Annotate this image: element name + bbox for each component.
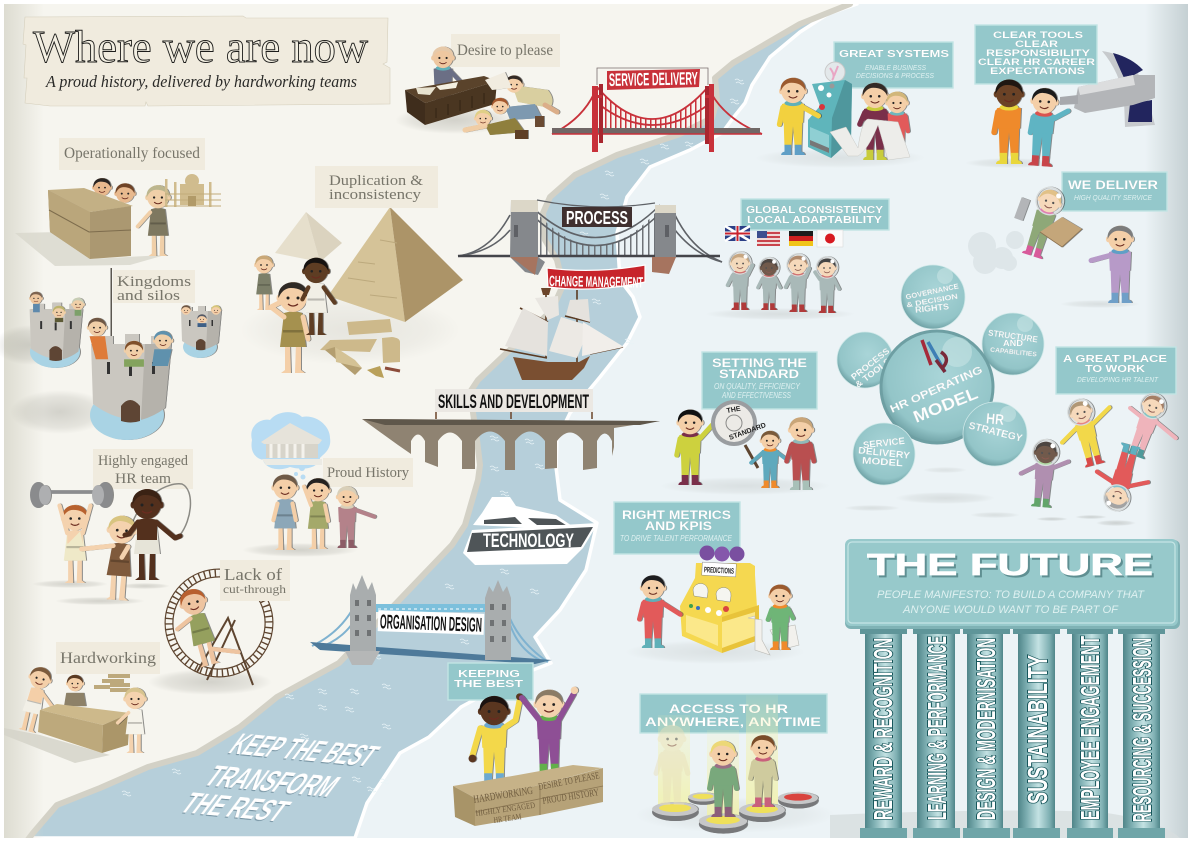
icon: Taj Mahal [165, 174, 221, 207]
desk [405, 76, 497, 125]
hull [463, 523, 598, 565]
skipping man [125, 489, 180, 580]
cables [458, 205, 722, 262]
label [451, 34, 560, 67]
teleport pads [652, 792, 818, 834]
banner rope [537, 200, 655, 207]
pillar: resourcing and succession: RESOURCING & SUCCESSION [1127, 638, 1157, 822]
panel: global consistency [705, 199, 889, 320]
icon: HR logo [922, 340, 946, 372]
ground shadow [240, 295, 460, 365]
left tower [345, 575, 380, 665]
front worker [118, 687, 147, 753]
hull [513, 356, 590, 380]
sphere: HR strategy [963, 402, 1027, 466]
name: TECHNOLOGY [483, 531, 574, 552]
large central castle [87, 318, 173, 440]
sphere: process and tools [837, 332, 893, 390]
rear workers [15, 665, 86, 737]
hangers [537, 213, 655, 255]
label: ENABLE BUSINESS [865, 63, 926, 72]
workers [92, 178, 171, 256]
pillar: employee engagement [1067, 628, 1113, 838]
skipping rope [130, 484, 190, 535]
floor shadows [1036, 515, 1136, 526]
heading: THE FUTURE [867, 547, 1153, 582]
label: HIGH QUALITY SERVICE [1074, 193, 1153, 202]
bridge: process [458, 200, 722, 275]
label [59, 138, 205, 170]
sign [378, 610, 484, 637]
sphere: service delivery: DELIVERY [858, 445, 910, 461]
label: WE DELIVER [1068, 180, 1159, 192]
boxer girl [78, 513, 138, 601]
astronauts [728, 252, 839, 313]
sign: SKILLS AND DEVELOPMENT [438, 391, 589, 413]
label: CLEAR [1015, 39, 1058, 50]
ground shadow [395, 106, 515, 134]
hr operating model spheres [837, 265, 1044, 518]
label: ANYWHERE, ANYTIME [645, 715, 821, 729]
stone block [48, 188, 133, 259]
stone viaduct [362, 419, 660, 470]
label [113, 270, 195, 304]
pillars [860, 628, 1165, 838]
label [93, 449, 193, 489]
sphere: process and tools: PROCESS [849, 346, 892, 382]
pillar: learning and performance [913, 628, 960, 838]
characters [709, 735, 776, 817]
pillar: sustainability: SUSTAINABILITY [1022, 655, 1053, 804]
panel: the future [830, 539, 1180, 838]
hamster wheel [169, 573, 269, 685]
scene: desire to please [395, 34, 560, 139]
sphere: main operating model: MODEL [910, 384, 981, 427]
characters [779, 78, 909, 160]
banner: PROCESS [566, 208, 628, 228]
label [702, 352, 817, 409]
label: TO DRIVE TALENT PERFORMANCE [620, 534, 733, 543]
panel: setting the standard [660, 352, 830, 495]
pillar: resourcing and succession [1118, 628, 1165, 838]
light beams [658, 695, 778, 820]
label: Proud History [327, 465, 409, 481]
towers [592, 84, 714, 152]
label: THE BEST [454, 678, 524, 690]
river slogan [173, 727, 387, 828]
banner: change management: CHANGE MANAGEMENT [549, 273, 643, 292]
jetpack courier [1014, 184, 1067, 260]
paper readout [830, 119, 910, 160]
label: RESPONSIBILITY [986, 48, 1091, 59]
ground shadow [635, 797, 835, 833]
sphere: structure: CAPABILITIES [990, 347, 1038, 359]
ground shadows [10, 390, 110, 434]
crates: HIGHLY ENGAGED [475, 800, 536, 818]
sphere: governance: & DECISION [906, 292, 958, 309]
icon: magnifying glass with the standard: STANDARD [728, 422, 767, 442]
small right castle [181, 305, 221, 358]
workers [254, 255, 335, 373]
parchment [23, 16, 390, 106]
label: LOCAL ADAPTABILITY [747, 215, 882, 226]
label [56, 642, 160, 674]
label: GLOBAL CONSISTENCY [746, 205, 883, 216]
manifesto: PEOPLE MANIFESTO: TO BUILD A COMPANY THAT [877, 589, 1145, 601]
label: EXPECTATIONS [990, 66, 1085, 77]
flags [725, 226, 843, 247]
scene: hardworking [4, 642, 160, 763]
label: CLEAR HR CAREER [978, 57, 1095, 68]
small pyramid [275, 212, 342, 262]
floor shadows [844, 467, 1020, 518]
bridge: organisation design [310, 575, 552, 665]
crates: DESIRE TO PLEASE [537, 770, 600, 793]
label: A GREAT PLACE [1063, 353, 1167, 365]
small left castle [29, 292, 85, 368]
flag pole [110, 268, 112, 360]
label [323, 458, 413, 487]
panel: right metrics and KPIs [614, 502, 805, 664]
label: SETTING THE [712, 358, 807, 370]
label: TO WORK [1085, 363, 1145, 375]
panel: access to HR [635, 694, 835, 834]
ground shadow [830, 811, 1180, 838]
label: Kingdoms [117, 274, 191, 290]
scene: kingdoms and silos [0, 268, 221, 440]
deck [552, 128, 762, 134]
ship [500, 288, 624, 380]
sphere: main operating model [881, 331, 993, 443]
sphere: service delivery [853, 423, 915, 485]
sphere: service delivery: MODEL [862, 455, 904, 469]
label: STANDARD [719, 369, 799, 381]
flag: Japan [817, 230, 843, 247]
label: KEEPING [458, 668, 520, 680]
name band [467, 527, 593, 552]
ground shadow [4, 728, 110, 763]
right edge shading [1145, 4, 1188, 838]
thought cloud with temple [251, 412, 330, 480]
ground shadow [1060, 300, 1140, 308]
ground shadow [148, 669, 272, 695]
sign [435, 389, 593, 419]
walkway [372, 604, 492, 612]
pillar: sustainability [1013, 628, 1060, 838]
crates [453, 765, 603, 826]
yacht: technology [463, 497, 598, 565]
sphere: governance [901, 265, 965, 329]
label [741, 199, 889, 230]
label: DECISIONS & PROCESS [856, 71, 934, 80]
label [834, 42, 953, 88]
icon: magnifying glass with the standard [711, 400, 767, 468]
parcel [1040, 217, 1082, 247]
river [25, 4, 857, 838]
sphere: governance: RIGHTS [915, 302, 950, 315]
transform: TRANSFORM [197, 759, 347, 803]
sphere: structure: STRUCTURE [988, 329, 1039, 345]
manifesto line 2: ANYONE WOULD WANT TO BE PART OF [902, 604, 1119, 616]
label: DEVELOPING HR TALENT [1077, 375, 1159, 384]
windows [484, 517, 566, 525]
main cables [552, 87, 762, 134]
flag: USA [757, 231, 780, 246]
old clerk [431, 46, 462, 112]
ground shadow [965, 158, 1055, 168]
label [220, 560, 290, 601]
panel: clear tools [965, 25, 1155, 168]
machine [808, 62, 852, 158]
stone box [38, 704, 130, 753]
sphere: main operating model: HR OPERATING [888, 364, 985, 416]
stone blocks [320, 319, 400, 378]
masts and yards [500, 288, 623, 362]
runner [168, 581, 240, 671]
label [614, 502, 740, 554]
rocket exhaust smoke [968, 231, 1024, 274]
label: GREAT SYSTEMS [839, 48, 949, 60]
label: Hardworking [60, 650, 156, 667]
floating kids [1018, 387, 1188, 517]
characters [676, 409, 717, 485]
title text: Where we are now [33, 21, 369, 72]
scene: proud history [242, 412, 413, 557]
ground shadow [755, 148, 925, 168]
panel: a great place to work [1018, 347, 1188, 526]
suspender cables [597, 87, 708, 130]
deck [310, 642, 552, 664]
label: RIGHT METRICS [622, 510, 731, 522]
sphere: process and tools: & TOOLS [853, 356, 893, 390]
scene: highly engaged HR team [30, 449, 193, 605]
ground shadows [32, 580, 170, 605]
weightlifter [30, 482, 113, 583]
banner: SERVICE DELIVERY [609, 68, 698, 90]
bridge: organisation design: ORGANISATION DESIGN [380, 611, 482, 637]
pillar: reward and recognition: REWARD & RECOGNITION [868, 638, 898, 820]
sphere: HR strategy: HR [985, 410, 1005, 429]
crates: HARDWORKING [473, 785, 534, 806]
subtitle: A proud history, delivered by hardworking teams [45, 72, 357, 91]
panel: we deliver [968, 172, 1167, 308]
label: inconsistency [329, 187, 422, 203]
sphere: service delivery: SERVICE [862, 436, 905, 450]
banner [562, 207, 632, 228]
banner [607, 68, 700, 90]
title banner [23, 16, 390, 106]
ground shadow [705, 308, 855, 320]
ground shadow [660, 477, 830, 495]
deck [458, 255, 720, 257]
receiver [1091, 226, 1134, 303]
deck shadow [362, 419, 660, 425]
label: and silos [117, 288, 180, 304]
ground shadow [242, 543, 358, 557]
colleagues [751, 417, 814, 490]
label [315, 166, 438, 208]
label: CLEAR TOOLS [993, 30, 1083, 41]
label [448, 663, 533, 700]
pillar: design and modernisation: DESIGN & MODERNISATION [971, 638, 1001, 820]
characters [994, 79, 1069, 168]
label: Operationally focused [64, 145, 200, 162]
prediction machine [680, 546, 759, 653]
superstructure [473, 497, 578, 530]
left bank land [0, 0, 855, 842]
label: AND EFFECTIVENESS [721, 391, 792, 400]
flag: Germany [789, 231, 813, 246]
panel: keeping the best [448, 663, 603, 826]
sphere: governance: GOVERNANCE [905, 281, 959, 302]
stacked bricks [94, 674, 130, 692]
the rest: THE REST [173, 786, 298, 828]
label: Desire to please [457, 42, 553, 59]
banner rope [597, 68, 708, 85]
icon: magnifying glass with the standard: THE [726, 406, 741, 415]
sphere: HR strategy: STRATEGY [967, 420, 1024, 445]
sphere: structure [982, 313, 1044, 375]
header board [845, 539, 1180, 629]
pillar: reward and recognition [860, 628, 907, 838]
bridge: service delivery [552, 68, 762, 152]
label: ACCESS TO HR [669, 702, 788, 716]
ground shadow [625, 640, 805, 664]
label [1062, 172, 1167, 211]
label: Duplication & [329, 173, 423, 189]
label: Lack of [224, 565, 282, 584]
large pyramid [328, 207, 463, 322]
label [975, 25, 1097, 84]
pillar: employee engagement: EMPLOYEE ENGAGEMENT [1075, 636, 1105, 820]
pillar: design and modernisation [963, 628, 1010, 838]
grovelling staff [465, 72, 557, 139]
telescope [1060, 51, 1155, 127]
label: HR team [115, 471, 172, 487]
hologram ghost [656, 725, 688, 805]
keep the best: KEEP THE BEST [222, 727, 387, 773]
characters [469, 687, 578, 785]
flag: UK [725, 226, 750, 241]
label: ON QUALITY, EFFICIENCY [714, 382, 801, 391]
panel: great systems [755, 42, 953, 168]
side suspension [312, 598, 548, 662]
label: AND KPIS [645, 521, 712, 533]
bridge: skills and development [362, 389, 660, 470]
towers [510, 200, 676, 275]
label: Highly engaged [98, 453, 189, 469]
villagers [271, 474, 374, 550]
crates: HR TEAM [493, 811, 522, 825]
crates: PROUD HISTORY [542, 787, 600, 807]
label [640, 694, 827, 733]
prediction machine: PREDICTIONS [704, 565, 735, 576]
scene: duplication and inconsistency [240, 166, 463, 378]
scene: operationally focused [15, 138, 221, 266]
crow's nest [541, 288, 551, 295]
characters [639, 575, 793, 650]
sails [505, 296, 624, 358]
scene: lack of cut-through wheel [148, 560, 290, 695]
ground shadow [15, 232, 165, 266]
label [1056, 347, 1176, 394]
left edge shading [4, 4, 44, 838]
river ripples [122, 79, 744, 796]
banner: change management [547, 265, 645, 292]
label: cut-through [223, 582, 286, 596]
pillar: learning and performance: LEARNING & PERFORMANCE [922, 636, 952, 820]
right tower [485, 580, 511, 660]
output paper [748, 616, 799, 655]
sphere: structure: AND [1003, 339, 1023, 348]
